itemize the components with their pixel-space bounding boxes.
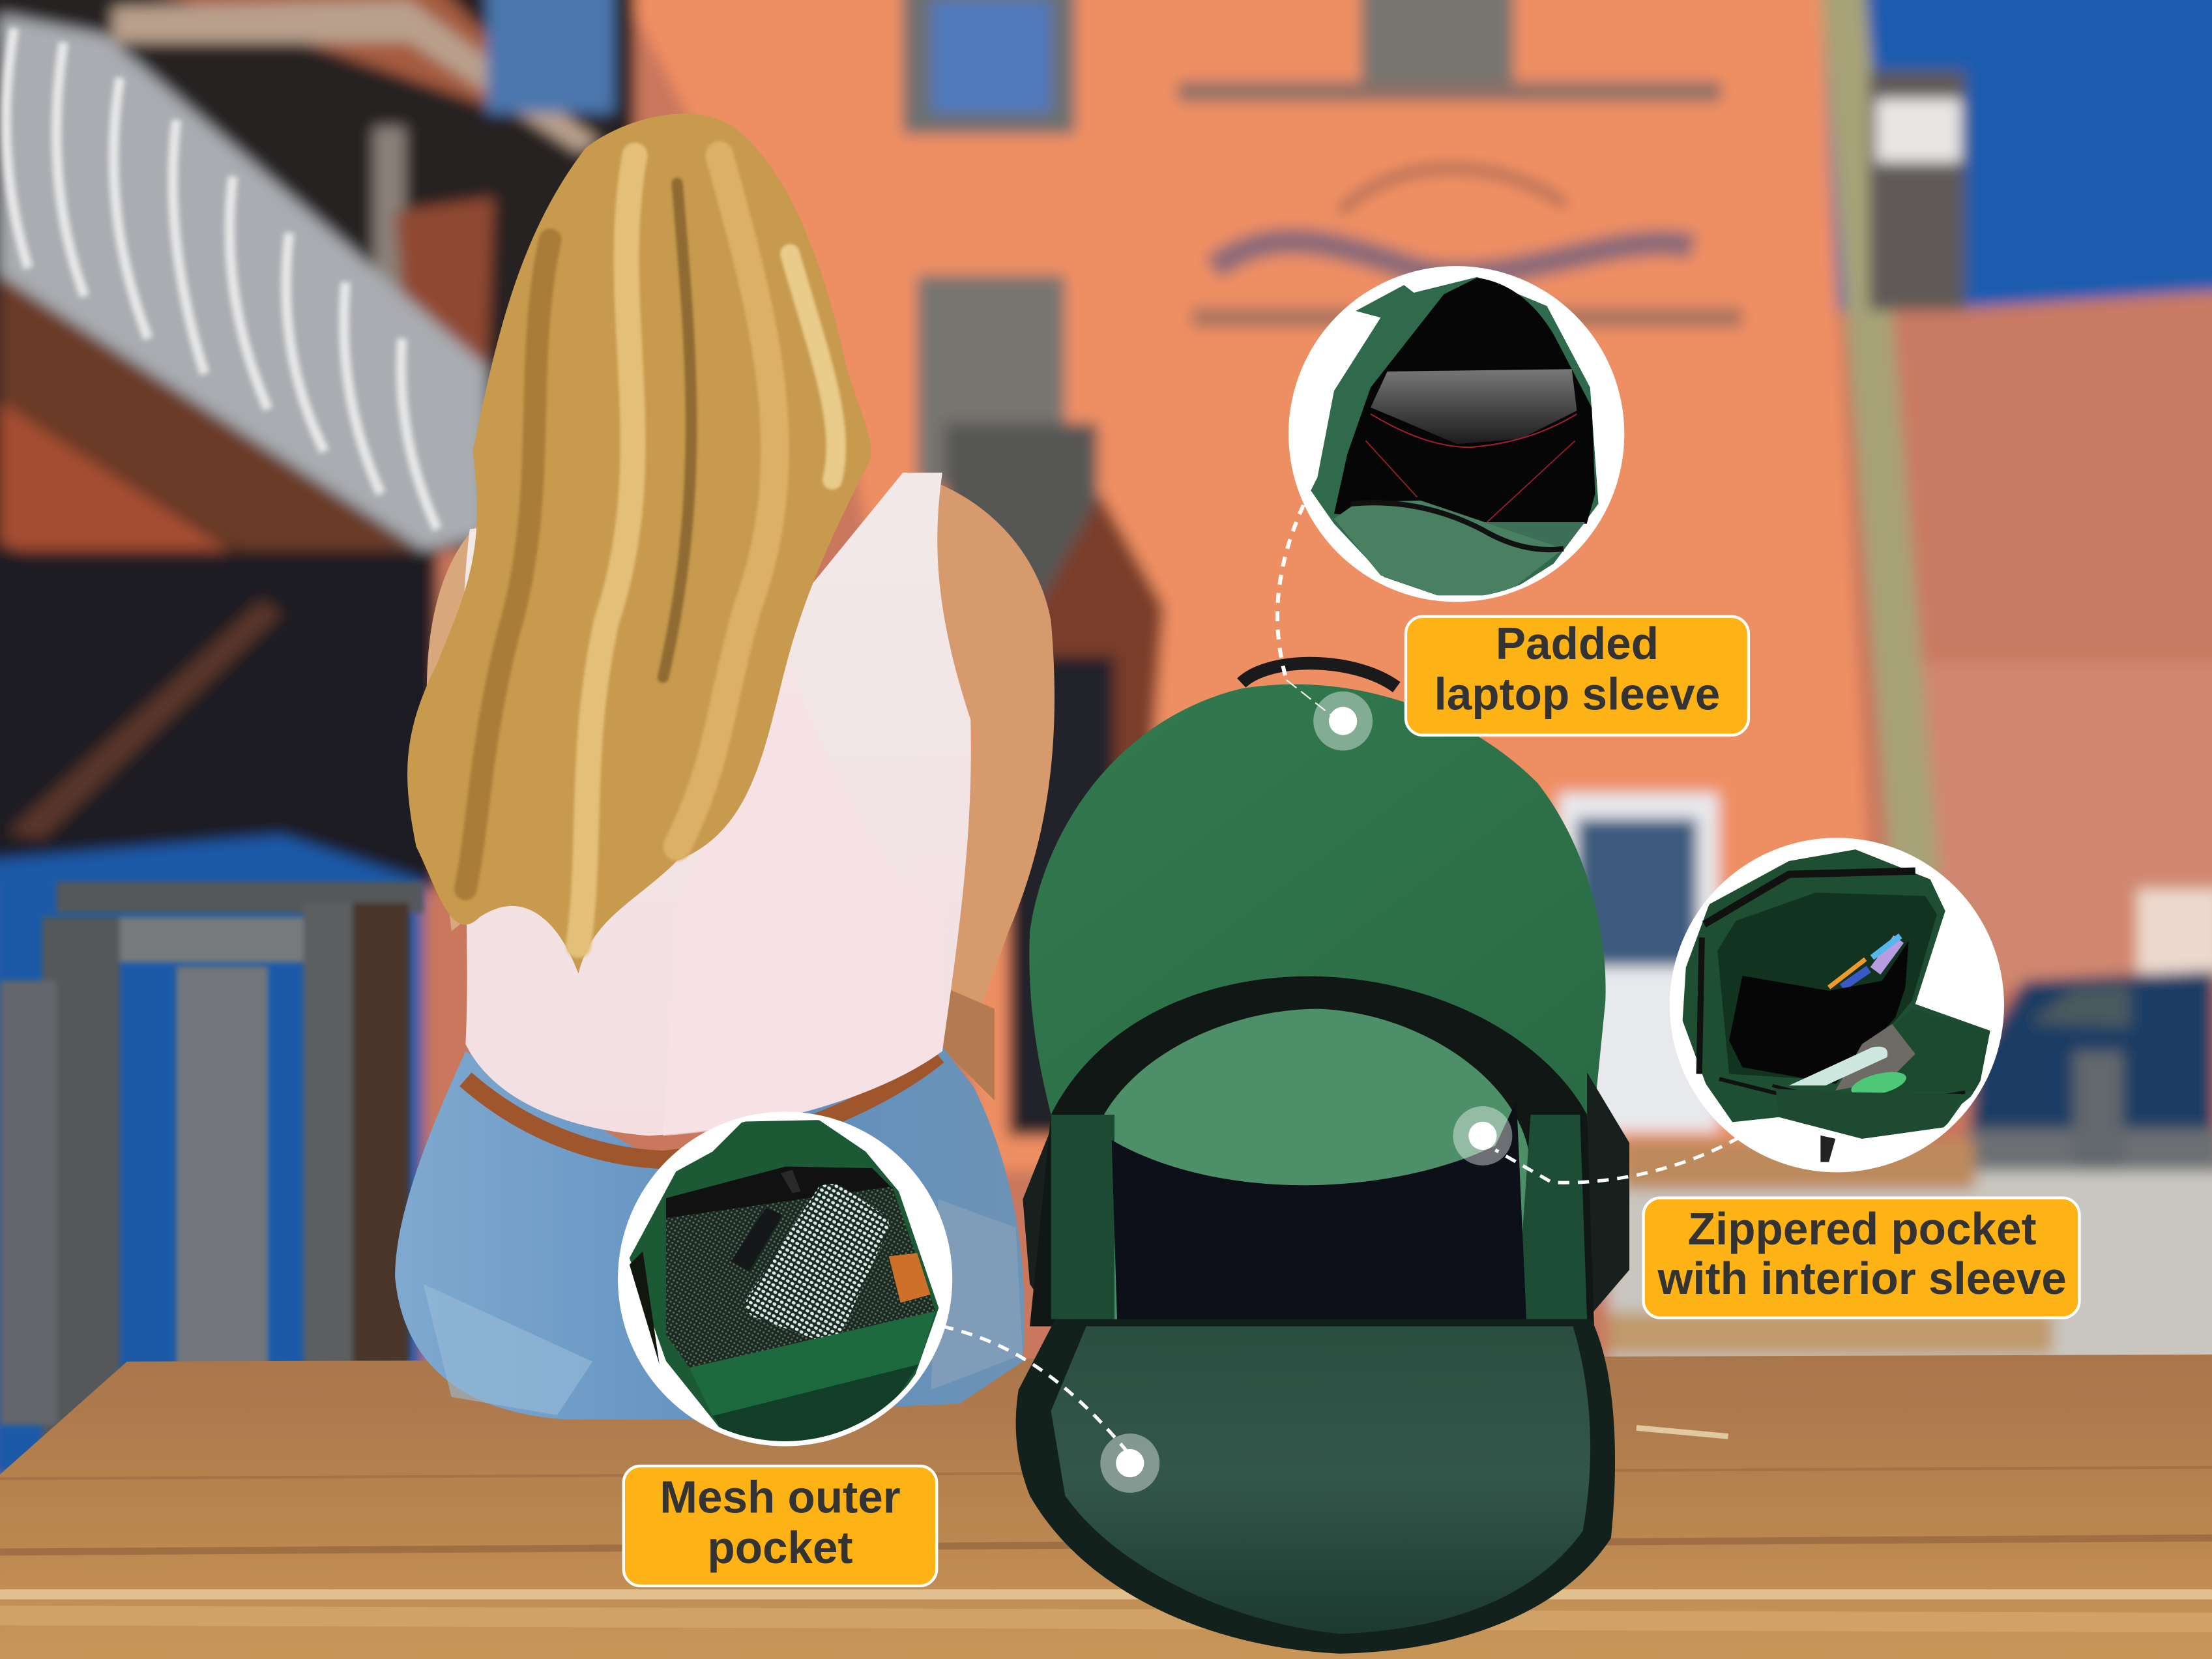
marker: lower flap: [1100, 1433, 1159, 1493]
orange building: [614, 0, 1890, 1171]
sky: [1806, 0, 2212, 310]
grey wooden fence: [0, 882, 423, 1453]
connector: zippered pocket: [1495, 1138, 1739, 1182]
road and benches: [1608, 1171, 2212, 1369]
top zipper: [1242, 664, 1397, 687]
inset: zippered pocket: [1670, 838, 2004, 1172]
inset: mesh outer pocket: [618, 1111, 952, 1446]
label: mesh outer pocket: Mesh outer: [660, 1471, 901, 1522]
lower window: [1559, 793, 1718, 1132]
utility pole: [1820, 0, 1940, 875]
white tank top: [462, 473, 971, 1136]
upper body: [1029, 684, 1606, 1115]
marker: interior pocket: [1453, 1106, 1512, 1166]
connector tail: laptop: [1287, 680, 1333, 717]
label: zippered pocket with interior sleeve: Zippered pocket: [1688, 1203, 2037, 1254]
label: padded laptop sleeve: [1406, 617, 1749, 735]
wooden table: [0, 1355, 2212, 1659]
blonde hair: [407, 113, 871, 973]
woman from behind: [395, 113, 1055, 1419]
label: mesh outer pocket: [624, 1466, 937, 1586]
jeans: [395, 1041, 1025, 1419]
label: padded laptop sleeve: laptop sleeve: [1434, 669, 1720, 720]
interior lining: [1086, 1009, 1531, 1327]
label: zippered pocket with interior sleeve: with interior sleeve: [1657, 1253, 2067, 1304]
balcony railing: [0, 14, 487, 550]
connector: padded laptop sleeve: [1277, 505, 1303, 680]
label: padded laptop sleeve: Padded: [1496, 618, 1659, 669]
opening: [1030, 976, 1594, 1327]
inset: padded laptop sleeve: [1288, 266, 1624, 602]
pens: [1829, 959, 1865, 988]
building sign: [1214, 241, 1693, 275]
lower flap: [1016, 1319, 1615, 1654]
side mesh pocket: [1587, 1072, 1629, 1319]
car: [1968, 971, 2212, 1178]
label: mesh outer pocket: pocket: [707, 1522, 853, 1573]
marker: top of backpack: [1313, 692, 1373, 751]
connector: mesh pocket: [942, 1327, 1129, 1453]
middle window and balcony: [917, 275, 1065, 487]
blue bin: [0, 835, 423, 1482]
white window right: [2137, 889, 2212, 973]
upper left building: [0, 0, 635, 550]
arms and back skin: [903, 473, 1055, 1009]
black interior pocket: [1112, 1100, 1526, 1327]
backpack: [1016, 664, 1629, 1654]
railing bars: [7, 28, 437, 529]
brick building right: [1890, 289, 2212, 988]
belt: [465, 1055, 938, 1160]
doorway: [1015, 494, 1164, 1129]
top windows: [903, 0, 1075, 134]
label: zippered pocket with interior sleeve: [1644, 1198, 2079, 1318]
